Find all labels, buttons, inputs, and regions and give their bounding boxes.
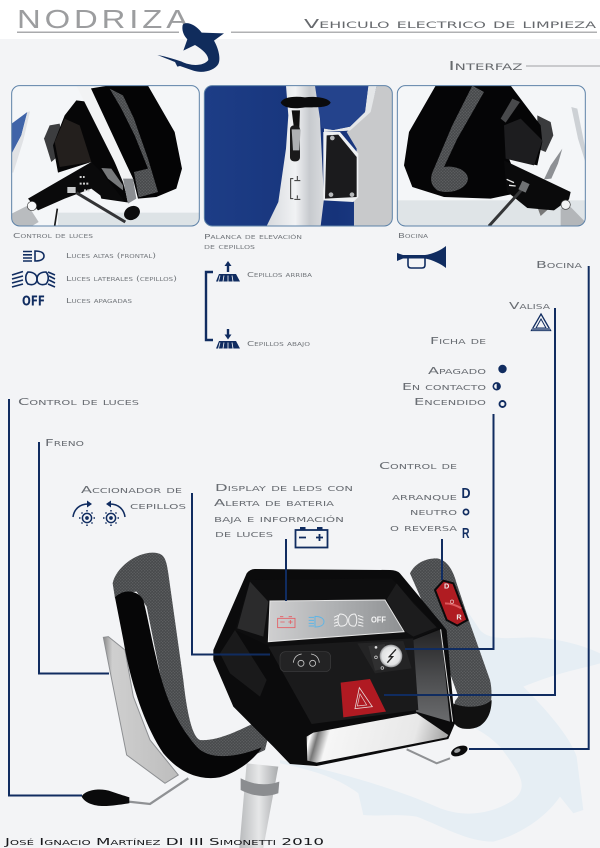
label: display de leds: Alerta de bateria (214, 498, 334, 509)
logo: shark (157, 23, 224, 72)
brake plate (103, 637, 178, 783)
icon: bracket elevación (206, 272, 213, 340)
label: o reversa: o reversa (390, 523, 457, 534)
label: accionador de cepillos (81, 485, 187, 512)
display icon: side lights (334, 614, 363, 626)
console body (213, 569, 455, 766)
right lever (407, 743, 469, 763)
control console (213, 569, 455, 766)
drive switch: R (456, 612, 462, 621)
hazard button (341, 679, 386, 717)
drive switch (435, 581, 467, 626)
icon: cepillo abajo (216, 329, 240, 348)
legend: luces altas: Luces altas (frontal) (66, 252, 156, 260)
label: bocina: Bocina (536, 260, 582, 271)
chrome skirt (307, 713, 448, 763)
icon: apagado (498, 365, 507, 373)
footer credit: José Ignacio Martínez DI III Simonetti 2010 (3, 837, 324, 848)
section heading: interfaz: Interfaz (448, 58, 522, 73)
label: valisa: Valisa (509, 301, 550, 312)
icon: D: D (462, 485, 471, 502)
right handlebar grip (407, 558, 492, 763)
icon: off: OFF (22, 294, 45, 310)
icon: batería (296, 527, 328, 548)
label: display de leds: Display de leds con (215, 483, 353, 494)
display icon: battery (278, 617, 295, 628)
display panel (268, 600, 404, 642)
label: freno: Freno (45, 438, 85, 449)
left handlebar grip (82, 553, 279, 848)
icon: giro de cepillos (73, 500, 125, 526)
icon: neutro (463, 509, 469, 515)
icon: cepillo arriba (216, 261, 240, 282)
label: control de: Control de (379, 461, 457, 472)
label: en contacto: En contacto (402, 382, 487, 393)
caption: palanca de elevación: de cepillos (204, 243, 255, 251)
ignition key switch (357, 641, 412, 673)
subtitle: vehiculo electrico: Vehiculo electrico de limpieza (304, 16, 597, 31)
label: neutro: neutro (410, 507, 458, 518)
panel: palanca de elevación photo (204, 86, 392, 226)
label: control de luces: Control de luces (18, 397, 140, 408)
label: ficha de: Ficha de (430, 336, 486, 347)
icon: bocina (397, 246, 446, 268)
legend: luces apagadas: Luces apagadas (66, 297, 132, 305)
label: display de leds (214, 483, 353, 540)
panel: bocina photo (397, 86, 585, 226)
title: Nodriza: NODRIZA (17, 6, 192, 34)
label: arranque: arranque (392, 492, 457, 503)
drive switch: D (444, 582, 449, 591)
caption: control de luces: Control de luces (13, 232, 93, 240)
icon: triángulo valisa (532, 314, 550, 330)
brake lever (82, 778, 188, 806)
brush button (280, 652, 331, 672)
label: apagado: Apagado (428, 366, 487, 377)
caption: bocina: Bocina (398, 232, 429, 240)
display icon: headlight (309, 616, 324, 627)
label: accionador de cepillos: cepillos (130, 501, 187, 512)
display icon: off: OFF (371, 615, 386, 625)
watermark shark (280, 610, 600, 842)
label: display de leds: baja e información (214, 514, 344, 525)
legend: luces laterales: Luces laterales (cepillos) (66, 275, 177, 283)
label: accionador de cepillos: Accionador de (81, 485, 182, 496)
icon: R: R (462, 526, 470, 542)
panel: control de luces photo (12, 86, 199, 226)
steering column (239, 763, 279, 848)
label: encendido: Encendido (414, 397, 487, 408)
caption: palanca de elevación (204, 233, 302, 251)
header band (0, 0, 600, 39)
caption: palanca de elevación: Palanca de elevación (204, 233, 302, 241)
grip black inner (115, 592, 262, 778)
icon: en contacto (493, 383, 500, 390)
icon: luces altas (23, 251, 44, 261)
grip mesh (113, 553, 268, 765)
label: display de leds: de luces (215, 529, 274, 540)
legend: cepillos abajo: Cepillos abajo (247, 340, 310, 348)
legend: cepillos arriba: Cepillos arriba (247, 271, 313, 279)
icon: luces laterales (12, 272, 55, 287)
leader lines (9, 266, 589, 796)
icon: encendido (500, 401, 506, 407)
